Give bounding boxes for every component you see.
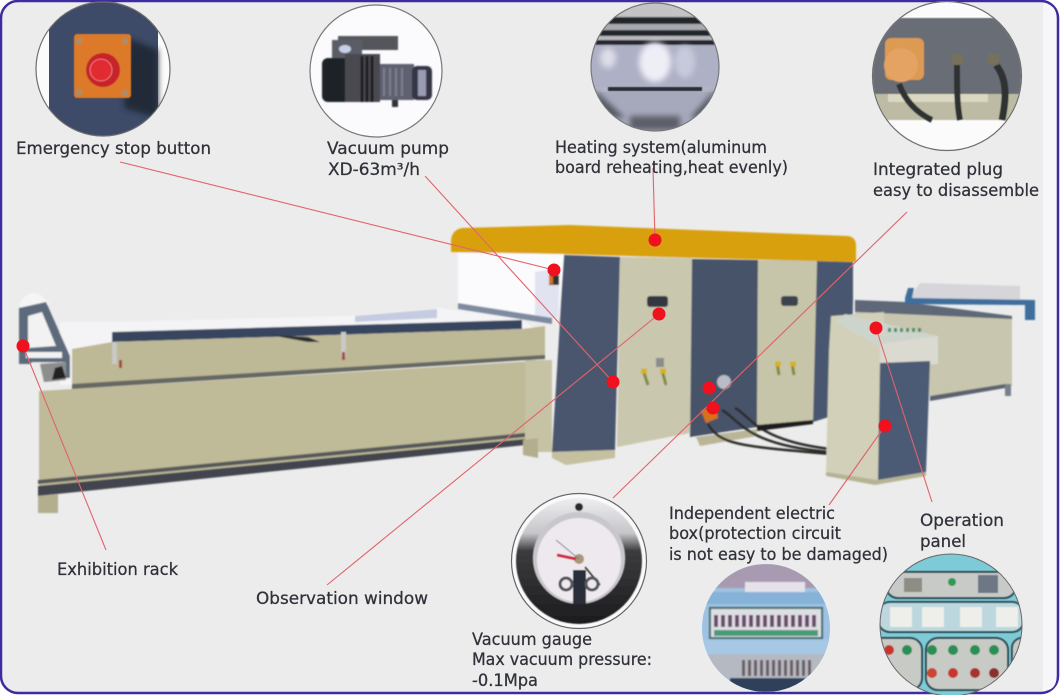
label: vacuum pump: XD-63m³/h bbox=[328, 160, 420, 179]
label: operation panel: Operation bbox=[920, 511, 1004, 530]
machine illustration bbox=[19, 225, 1035, 513]
machine: left roller rack bbox=[19, 293, 70, 382]
label: operation panel: panel bbox=[920, 532, 966, 551]
label: vacuum pump bbox=[327, 139, 449, 179]
machine: right film table bbox=[855, 283, 1035, 408]
icon: operation panel photo bbox=[880, 554, 1022, 695]
label: emergency stop button: Emergency stop button bbox=[16, 139, 211, 158]
label: exhibition rack: Exhibition rack bbox=[57, 560, 178, 579]
label: vacuum gauge: Max vacuum pressure: bbox=[472, 650, 652, 669]
machine: white vacuum chamber opening bbox=[458, 253, 564, 318]
label: independent electric box: Independent electric bbox=[669, 504, 835, 523]
label: integrated plug bbox=[873, 160, 1039, 200]
machine: central press body bbox=[549, 255, 853, 465]
icon: vacuum pump photo bbox=[310, 5, 442, 137]
red marker dots bbox=[16, 234, 892, 432]
icon: heating system photo bbox=[590, 0, 720, 132]
icon: integrated plug photo bbox=[870, 1, 1025, 151]
label: observation window: Observation window bbox=[256, 589, 428, 608]
leader lines bbox=[23, 162, 932, 585]
icon: vacuum gauge photo bbox=[511, 493, 647, 629]
label: heating system: Heating system(aluminum bbox=[555, 138, 767, 157]
label: vacuum gauge: -0.1Mpa bbox=[472, 671, 538, 690]
label: operation panel bbox=[920, 511, 1004, 551]
label: heating system: board reheating,heat evenly) bbox=[555, 158, 788, 177]
label: vacuum pump: Vacuum pump bbox=[327, 139, 449, 158]
label: vacuum gauge bbox=[472, 630, 652, 690]
label: independent electric box: box(protection circuit bbox=[669, 524, 842, 543]
label: integrated plug: Integrated plug bbox=[873, 160, 1003, 179]
label: independent electric box: is not easy to be damaged) bbox=[669, 545, 888, 564]
machine: yellow heating cover bbox=[451, 225, 856, 262]
label: vacuum gauge: Vacuum gauge bbox=[472, 630, 592, 649]
label: integrated plug: easy to disassemble bbox=[873, 181, 1039, 200]
icon: emergency stop button photo bbox=[36, 0, 170, 140]
icon: electric box photo bbox=[700, 564, 832, 692]
machine: left exhibition table bbox=[38, 308, 552, 513]
label: heating system bbox=[555, 138, 788, 177]
label: independent electric box bbox=[669, 504, 888, 564]
machine: operation cabinet bbox=[826, 312, 938, 485]
